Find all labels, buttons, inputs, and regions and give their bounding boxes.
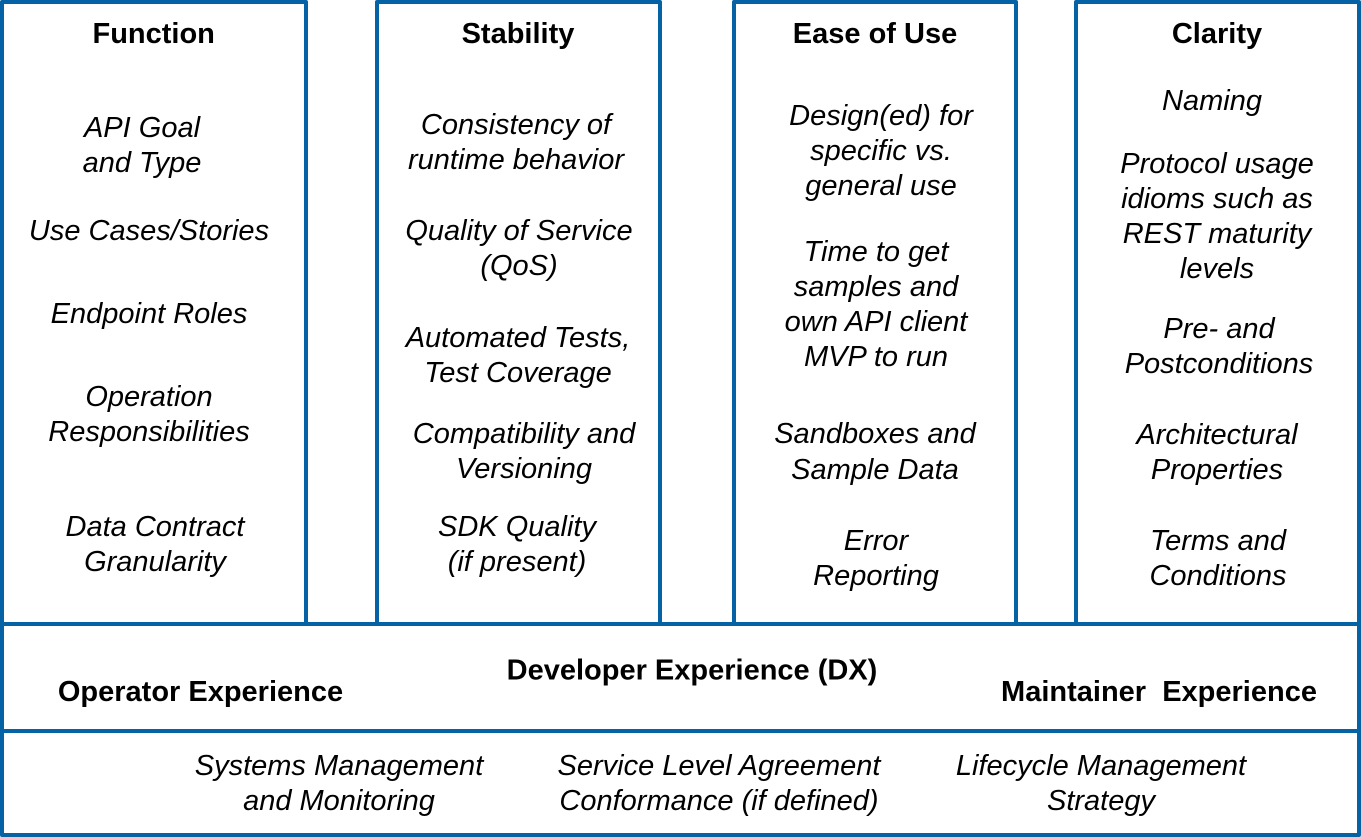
heading: Clarity: Clarity <box>1172 18 1262 50</box>
item: API Goal and Type: and Type <box>83 147 201 179</box>
item: Time to get samples and own API client MVP to run: own API client <box>785 306 969 338</box>
item: Systems Management and Monitoring: Systems Management <box>195 750 483 782</box>
item: Use Cases/Stories: Use Cases/Stories <box>29 215 269 247</box>
item: Automated Tests, Test Coverage: Test Coverage <box>424 357 612 389</box>
item: Endpoint Roles: Endpoint Roles <box>51 298 247 330</box>
heading: Maintainer Experience: Maintainer Experience <box>1001 676 1317 708</box>
item: Sandboxes and Sample Data: Sandboxes and <box>774 418 976 450</box>
item: Architectural Properties: Architectural <box>1136 419 1298 451</box>
panel: Clarity <box>1076 2 1359 624</box>
item: Systems Management and Monitoring: and Monitoring <box>243 785 435 817</box>
item: Sandboxes and Sample Data: Sample Data <box>791 454 959 486</box>
item: Service Level Agreement Conformance: Service Level Agreement <box>558 750 880 782</box>
item: Pre- and Postconditions: Postconditions <box>1125 348 1313 380</box>
panel: Ease of Use <box>734 2 1016 624</box>
item: Terms and Conditions: Terms and <box>1150 525 1286 557</box>
panel: Stability <box>377 2 660 624</box>
item: SDK Quality: (if present) <box>448 546 586 578</box>
item: Protocol usage idioms: idioms such as <box>1121 183 1313 215</box>
item: Design(ed) for specific vs. general use: Design(ed) for <box>789 100 973 132</box>
item: Time to get samples and own API client MVP to run: samples and <box>794 271 959 303</box>
item: Operation Responsibilities: Operation <box>85 381 213 413</box>
band: experience headings <box>2 624 1359 731</box>
heading: Operator Experience: Operator Experience <box>58 676 343 708</box>
item: Architectural Properties: Properties <box>1151 454 1283 486</box>
heading: Ease of Use: Ease of Use <box>793 18 957 50</box>
item: Quality of Service: Quality of Service <box>405 215 633 247</box>
item: Time to get samples and own API client MVP to run: MVP to run <box>804 341 948 373</box>
item: Lifecycle Management Strategy: Strategy <box>1047 785 1156 817</box>
band: operational concerns <box>2 731 1359 835</box>
item: Terms and Conditions: Conditions <box>1149 560 1287 592</box>
heading: Stability: Stability <box>462 18 574 50</box>
item: Service Level Agreement Conformance: Conformance (if defined) <box>559 785 879 817</box>
item: Design(ed) for specific vs. general use: general use <box>805 170 957 202</box>
heading: Function: Function <box>92 18 215 50</box>
item: Consistency of runtime behavior: Consistency of <box>421 109 611 141</box>
item: Compatibility and Versioning: Versioning <box>456 453 592 485</box>
item: Quality of Service: (QoS) <box>480 250 558 282</box>
item: Time to get samples and own API client MVP to run: Time to get <box>804 236 948 268</box>
panel: Function <box>2 2 306 624</box>
heading: Developer Experience (DX): Developer Experience (DX) <box>507 654 877 686</box>
item: Design(ed) for specific vs. general use: specific vs. <box>810 135 952 167</box>
item: Naming: Naming <box>1162 85 1262 117</box>
item: Operation Responsibilities: Responsibilities <box>48 416 250 448</box>
item: Pre- and Postconditions: Pre- and <box>1163 313 1275 345</box>
item: Protocol usage idioms: levels <box>1180 253 1254 285</box>
item: Compatibility and Versioning: Compatibility and <box>413 418 635 450</box>
item: Protocol usage idioms: REST maturity <box>1123 218 1313 250</box>
item: Consistency of runtime behavior: runtime behavior <box>408 144 625 176</box>
item: Error Reporting: Reporting <box>813 560 939 592</box>
item: Data Contract Granularity: Granularity <box>84 546 227 578</box>
item: Protocol usage idioms: Protocol usage <box>1120 148 1314 180</box>
item: Lifecycle Management Strategy: Lifecycle Management <box>956 750 1246 782</box>
item: Error Reporting: Error <box>844 525 908 557</box>
item: Automated Tests, Test Coverage: Automated Tests, <box>406 322 630 354</box>
item: API Goal and Type: API Goal <box>84 112 200 144</box>
item: Data Contract Granularity: Data Contract <box>66 511 244 543</box>
item: SDK Quality: SDK Quality <box>438 511 596 543</box>
